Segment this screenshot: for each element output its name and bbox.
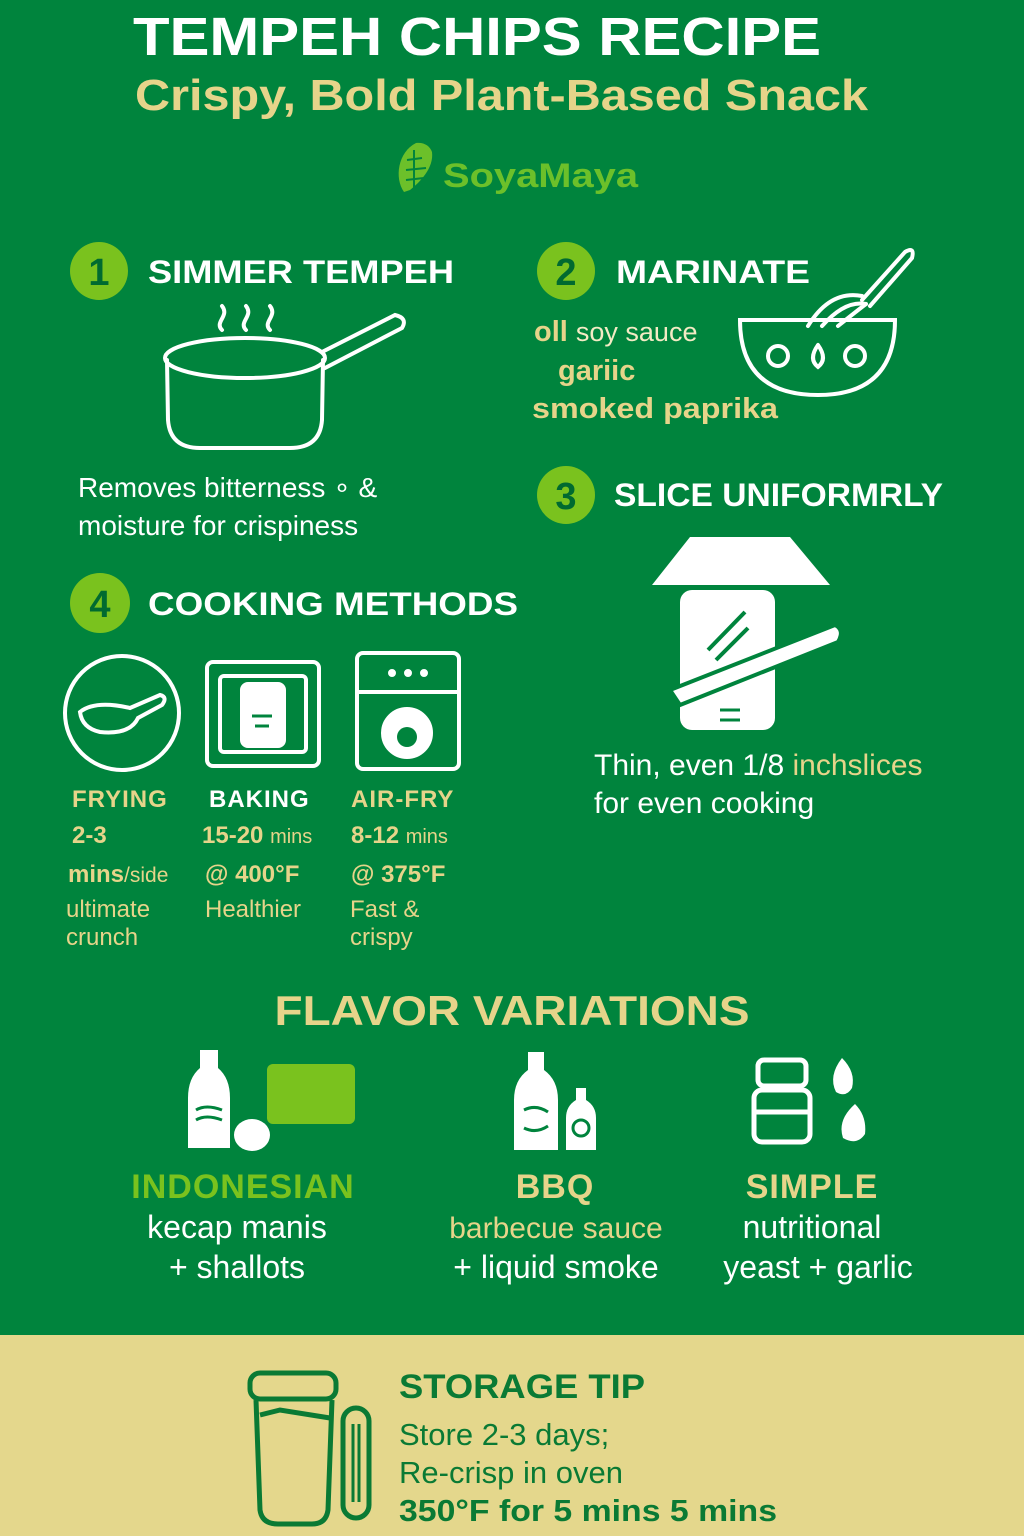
storage text: 350°F for 5 mins 5 mins [399,1493,777,1528]
storage text: Re-crisp in oven [399,1455,623,1490]
step 4 heading: 4 [89,584,111,626]
indonesian label: INDONESIAN [131,1168,355,1206]
air-fry label: Fast & [350,896,419,923]
icon: simple [754,1058,865,1142]
step 4 heading [70,573,518,633]
simple label: nutritional [743,1209,881,1245]
air-fry label: @ 375°F [351,861,445,888]
flavor variations heading: FLAVOR VARIATIONS [274,987,750,1034]
marinade ingredients: gariic [558,355,635,387]
step 1 heading: 1 [88,252,110,294]
step 3 heading: SLICE UNIFORMRLY [614,477,943,513]
frying label [66,786,168,951]
step 3 text: Thin, even 1/8 inchslices [594,749,923,782]
step 4 heading: COOKING METHODS [148,586,518,622]
bbq label: + liquid smoke [453,1249,659,1285]
frying label: crunch [66,924,138,951]
simple label [723,1168,913,1285]
frying label: FRYING [72,786,168,813]
frying label: ultimate [66,896,150,923]
step 2 heading [537,242,810,300]
icon: frying pan [65,656,179,770]
icon: indonesian [188,1050,355,1151]
air-fry label: AIR-FRY [351,786,454,813]
baking label: 15-20 mins [202,822,312,849]
marinade ingredients: smoked paprika [532,393,779,425]
logo [399,143,639,195]
step 2 heading: MARINATE [616,254,810,290]
indonesian label: kecap manis [147,1209,327,1245]
marinade ingredients: oll soy sauce [534,316,697,348]
step 2 heading: 2 [555,252,577,294]
icon: air fryer [357,653,459,769]
air-fry label: 8-12 mins [351,822,448,849]
storage panel [0,1335,1024,1536]
icon: bbq [514,1052,596,1150]
step 3 heading: 3 [555,476,577,518]
step 1 text: moisture for crispiness [78,510,358,541]
icon: bowl with whisk [740,250,913,395]
step 1 text [78,472,378,541]
bbq label: BBQ [516,1168,594,1206]
step 3 text [594,749,923,820]
marinade ingredients [532,316,779,425]
icon: slicer and knife [652,537,841,730]
indonesian label [131,1168,355,1285]
storage text [399,1368,777,1528]
step 1 text: Removes bitterness ∘ & [78,472,378,503]
step 1 heading: SIMMER TEMPEH [148,254,454,290]
step 3 heading [537,466,943,524]
frying label: mins/side [68,861,168,888]
title: TEMPEH CHIPS RECIPE [133,7,821,67]
step 3 text: for even cooking [594,787,814,820]
simple label: yeast + garlic [723,1249,913,1285]
baking label: @ 400°F [205,861,299,888]
icon: oven baking [207,662,319,766]
frying label: 2-3 [72,822,107,849]
air-fry label: crispy [350,924,413,951]
bbq label: barbecue sauce [449,1212,663,1245]
storage text: Store 2-3 days; [399,1417,609,1452]
step 1 heading [70,242,454,300]
baking label [202,786,312,923]
baking label: BAKING [209,786,310,813]
subtitle: Crispy, Bold Plant-Based Snack [135,71,869,120]
bbq label [449,1168,663,1285]
baking label: Healthier [205,896,301,923]
logo: SoyaMaya [443,157,639,195]
icon: storage jar [250,1373,369,1524]
icon: pot [165,306,404,448]
storage text: STORAGE TIP [399,1368,645,1406]
simple label: SIMPLE [746,1168,878,1206]
indonesian label: + shallots [169,1249,305,1285]
air-fry label [350,786,454,951]
